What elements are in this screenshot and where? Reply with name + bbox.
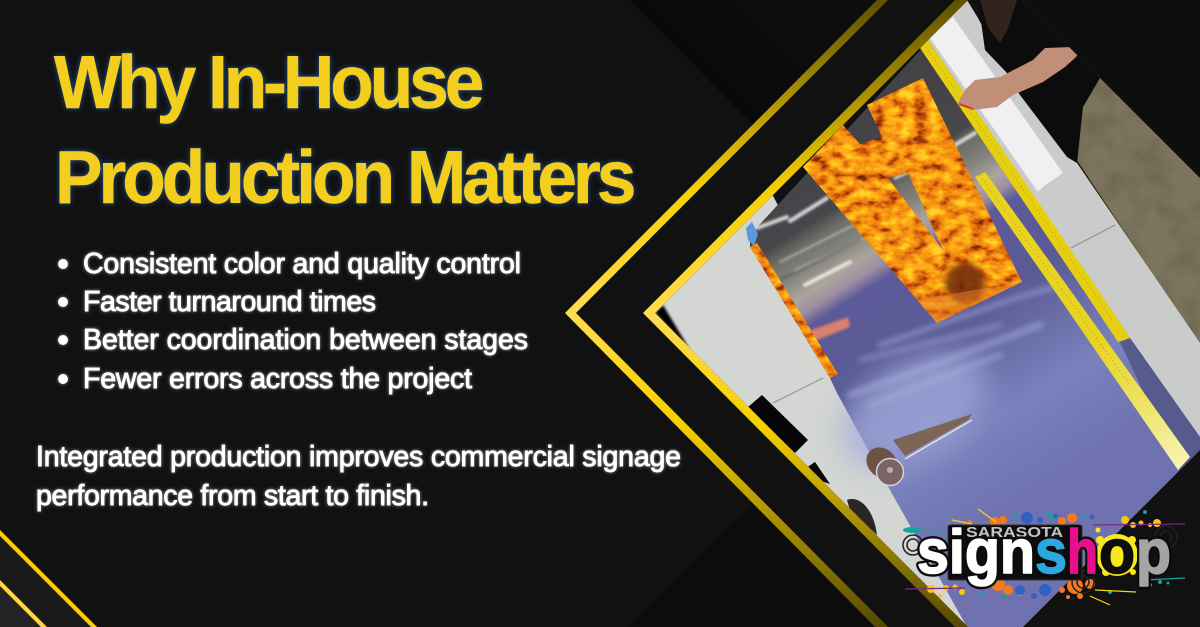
photo: poster wave streaks <box>757 133 975 285</box>
photo: white vinyl roll <box>930 17 1063 192</box>
bullet: fewer errors: Fewer errors across the project <box>83 363 472 395</box>
logo: yellow splat <box>1096 528 1138 576</box>
photo: head at table edge <box>847 499 877 535</box>
logo: Sarasota wordmark: SARASOTA <box>966 524 1063 541</box>
closing statement: performance from start to finish. <box>36 480 429 512</box>
photo: table seam <box>773 378 823 403</box>
inner gold chevron <box>643 0 968 627</box>
title <box>54 41 636 219</box>
title: Production Matters <box>55 136 636 219</box>
outer gold chevron <box>565 0 888 627</box>
photo: hair <box>980 0 1017 43</box>
logo: signshop wordmark: sign <box>917 518 1035 587</box>
photo: left table section <box>640 190 975 627</box>
bullet: better coordination: Better coordination between stages <box>83 324 528 356</box>
photo: ruler tick marks <box>924 44 1130 385</box>
logo: paint splatter <box>903 509 1185 605</box>
logo: signshop wordmark: o <box>1099 518 1135 587</box>
photo: table seam right <box>1071 225 1115 248</box>
bottom-left gold stripes <box>0 530 97 627</box>
photo: vignette near corner <box>655 305 690 350</box>
photo: poster cloud glow <box>832 341 996 478</box>
logo: signshop wordmark: s <box>1035 518 1067 587</box>
photo: flame letter H <box>800 75 1025 325</box>
logo: signshop wordmark: h <box>1067 518 1098 587</box>
photo: blue tape <box>746 222 758 246</box>
photo: upper yellow ruler <box>920 40 1130 342</box>
logo: signshop wordmark: p <box>1136 518 1171 587</box>
photo: poster clouds <box>850 285 1060 405</box>
bullet list <box>58 248 528 395</box>
photo: printed sky poster <box>750 45 1200 627</box>
photo: poster dark purple margin <box>1120 338 1200 470</box>
logo: signshop outline layer: h <box>1067 518 1098 587</box>
photo: lower yellow ruler <box>975 172 1190 470</box>
closing statement <box>36 441 681 512</box>
photo: table surface <box>928 0 1200 445</box>
closing statement: Integrated production improves commercial signage <box>36 441 681 473</box>
photo: jet engine on poster <box>860 414 972 486</box>
photo: black blocks on table <box>748 395 830 484</box>
photo: poster pink cloud <box>806 317 850 342</box>
photo: arm and hand <box>958 47 1077 110</box>
bullet: faster turnaround: Faster turnaround times <box>83 286 376 318</box>
logo: Sarasota Sign Shop <box>903 509 1185 605</box>
photo: sign production table <box>640 0 1200 627</box>
logo: black plate <box>948 525 1082 580</box>
logo: signshop outline layer: sign <box>917 518 1035 587</box>
logo: signshop wordmark <box>917 518 1171 587</box>
logo: signshop outline layer <box>917 518 1171 587</box>
photo: floor <box>1022 0 1200 343</box>
logo: signshop outline layer: p <box>1136 518 1171 587</box>
photo: poster strip edge <box>750 243 838 378</box>
title: Why In-House <box>54 41 484 124</box>
bullet: consistent color: Consistent color and quality control <box>83 248 521 280</box>
photo: person in black <box>958 0 1100 163</box>
logo: signshop outline layer: s <box>1035 518 1067 587</box>
